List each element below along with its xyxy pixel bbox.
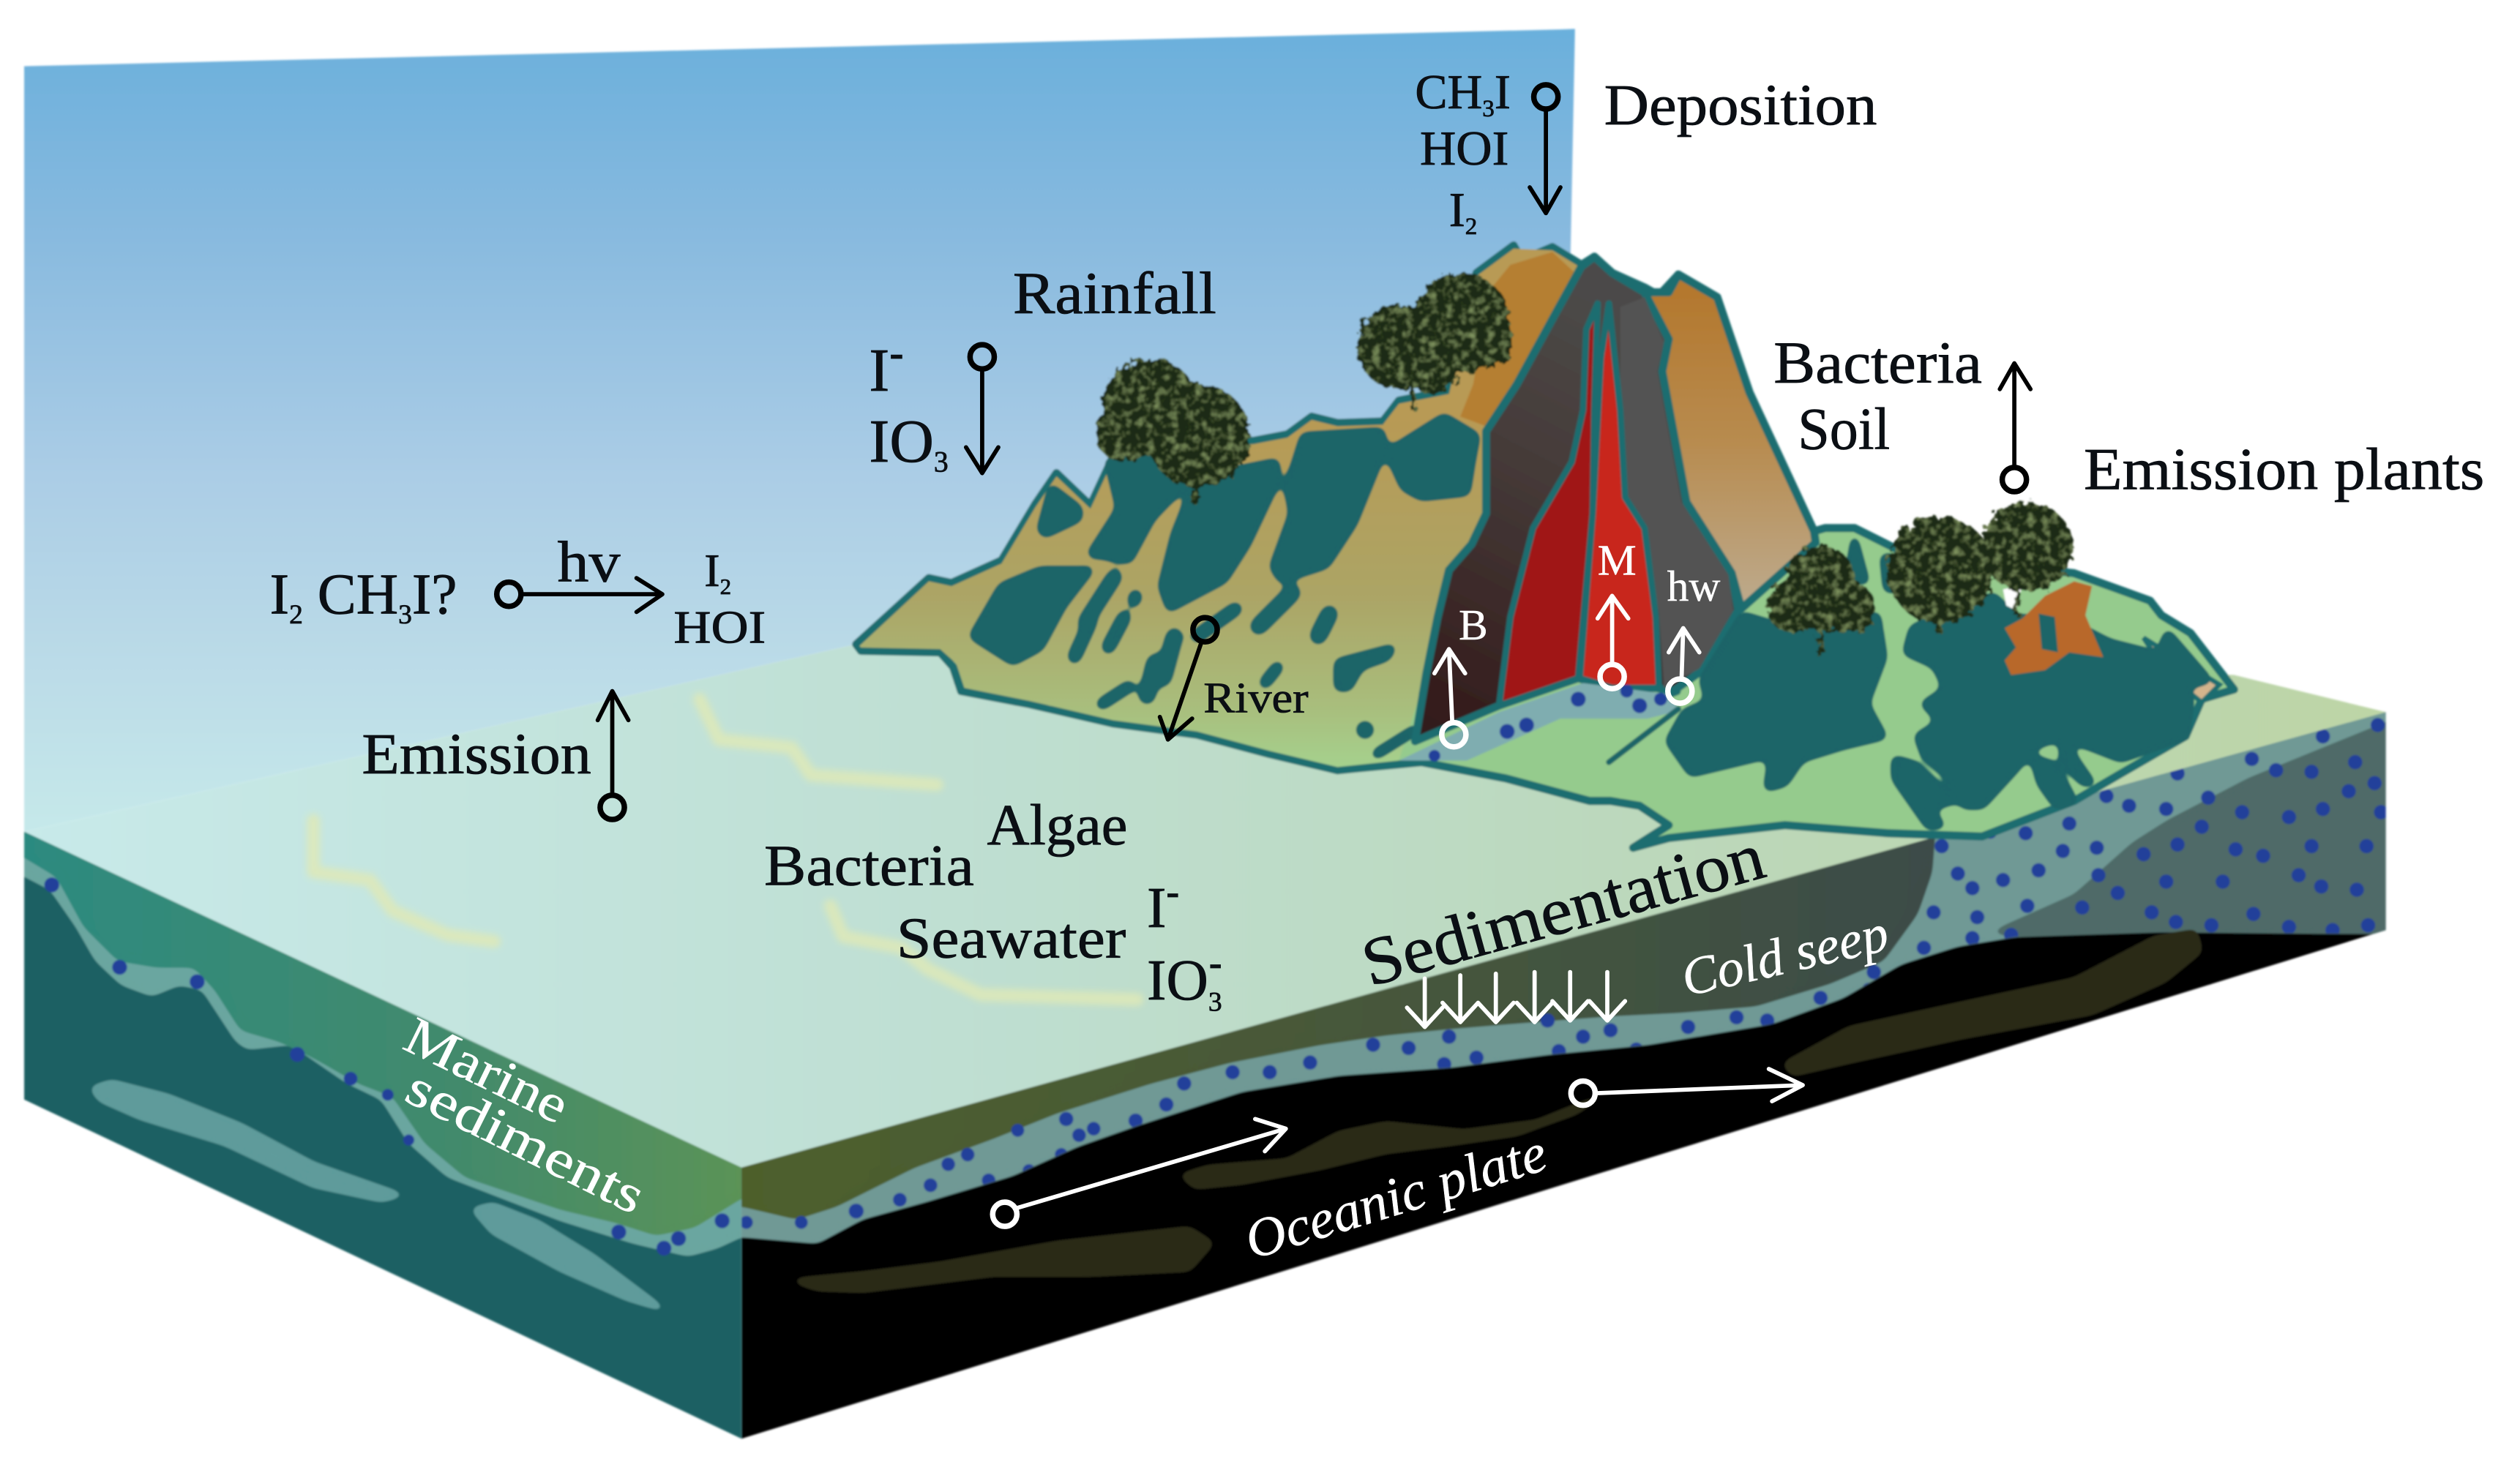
orange soil patch bbox=[2005, 581, 2104, 675]
dots at volcano foot bbox=[1429, 685, 1667, 762]
label: rainfall species: - bbox=[889, 330, 903, 376]
label: deposited species: 2 bbox=[1465, 214, 1477, 240]
dark lenses in the oceanic plate bbox=[793, 931, 2200, 1290]
lenses in left face bbox=[92, 1082, 664, 1310]
grey sediment band at volcano foot bbox=[1399, 683, 1680, 760]
label: deposited species: I bbox=[1495, 66, 1511, 119]
label: Deposition: Deposition bbox=[1604, 73, 1877, 138]
label: rainfall species bbox=[869, 330, 949, 478]
label: photolysis products bbox=[673, 544, 766, 653]
arrow: plate motion right bbox=[1571, 1069, 1803, 1106]
label: seawater species: IO bbox=[1147, 948, 1208, 1013]
label: seawater species bbox=[1147, 871, 1222, 1018]
tree 5 bbox=[1982, 502, 2073, 615]
arrow: river bbox=[1160, 618, 1217, 740]
label: deposited species: HOI bbox=[1420, 122, 1508, 176]
label: photolysis products: I bbox=[704, 544, 720, 596]
label: photolysis products: 2 bbox=[720, 574, 731, 599]
label: deposited species: 3 bbox=[1482, 96, 1495, 122]
algae streaks on seawater bbox=[313, 699, 1137, 999]
label: seawater species: 3 bbox=[1208, 988, 1222, 1018]
volcano: grey eastern flank bbox=[1620, 297, 1733, 688]
arrow: plate motion left bbox=[992, 1119, 1286, 1226]
arrow: hw bbox=[1668, 628, 1700, 703]
brown upper slope bbox=[1460, 252, 1575, 427]
tree 1 bbox=[1095, 359, 1250, 504]
label: volatile iodine: I? bbox=[412, 563, 457, 627]
label: photolysis products: HOI bbox=[673, 601, 766, 653]
label: Marine sediments: Marine bbox=[395, 1005, 578, 1135]
island: green coast and shoreline bbox=[856, 245, 2234, 848]
left face sediment dots bbox=[45, 877, 730, 1256]
label: Emission plants: Emission plants bbox=[2084, 436, 2484, 503]
label: seawater species: - bbox=[1209, 942, 1222, 984]
label: volatile iodine: 2 bbox=[289, 600, 303, 630]
tan western hillside bbox=[859, 249, 1582, 767]
tree 4 bbox=[1887, 517, 1993, 633]
teal vegetation patches on western hillside bbox=[973, 416, 1476, 754]
label: Cold seep: Cold seep bbox=[1676, 903, 1893, 1008]
label: rainfall species: IO bbox=[869, 408, 934, 476]
light sediment layer bbox=[711, 686, 2415, 1243]
front block face: oceanic plate bbox=[711, 686, 2415, 1438]
tree 3 bbox=[1767, 546, 1875, 657]
sky backdrop bbox=[24, 29, 1575, 832]
arrows: sedimentation bbox=[1407, 972, 1625, 1027]
cold seep and olive layer bbox=[711, 807, 1937, 1219]
darker accretion wedge bbox=[1997, 721, 2387, 939]
label: Soil: Soil bbox=[1798, 396, 1890, 462]
arrow: B bbox=[1435, 649, 1466, 747]
label: hw: hw bbox=[1667, 562, 1720, 610]
label: hv: hv bbox=[557, 530, 621, 594]
label: Marine sediments bbox=[395, 1005, 655, 1226]
label: rainfall species: 3 bbox=[934, 446, 949, 478]
label: River: River bbox=[1203, 673, 1309, 721]
label: volatile iodine: CH bbox=[303, 563, 398, 627]
label: seawater species: - bbox=[1166, 871, 1179, 913]
label: Bacteria on land: Bacteria bbox=[1773, 329, 1982, 396]
magma chamber left (dark red) bbox=[1499, 304, 1598, 705]
eastern hills bbox=[1669, 539, 2219, 827]
arrow: emission from plants and soil bbox=[2000, 364, 2030, 492]
label: Algae: Algae bbox=[987, 793, 1128, 858]
front face sediment dots bbox=[740, 718, 2388, 1228]
label: Sedimentation: Sedimentation bbox=[1354, 818, 1773, 1002]
label: Marine sediments: sediments bbox=[397, 1057, 655, 1226]
arrow: sea emission bbox=[598, 691, 629, 819]
seawater surface bbox=[24, 645, 2386, 1168]
brown eastern slope bbox=[1645, 274, 1816, 609]
tree 2 bbox=[1357, 273, 1514, 410]
label: volatile iodine: I bbox=[270, 563, 289, 627]
arrow: rainfall bbox=[966, 345, 998, 473]
arrow: M bbox=[1598, 596, 1629, 689]
label: deposited species: I bbox=[1449, 184, 1465, 237]
label: Bacteria in seawater: Bacteria bbox=[764, 833, 974, 898]
coastal line bbox=[1609, 709, 1678, 762]
label: M: M bbox=[1598, 536, 1637, 585]
label: volatile iodine: 3 bbox=[398, 600, 412, 630]
label: Seawater: Seawater bbox=[897, 907, 1126, 971]
label: rainfall species: I bbox=[869, 337, 889, 405]
label: seawater species: I bbox=[1147, 876, 1166, 940]
label: deposited species: CH bbox=[1415, 66, 1482, 119]
left block face: marine sediments bbox=[23, 830, 744, 1440]
label: Rainfall: Rainfall bbox=[1013, 260, 1216, 326]
label: Oceanic plate: Oceanic plate bbox=[1238, 1122, 1554, 1272]
arrow: deposition bbox=[1530, 85, 1560, 213]
label: Emission: Emission bbox=[362, 722, 591, 787]
label: B: B bbox=[1459, 601, 1488, 649]
label: deposited species bbox=[1415, 66, 1511, 240]
magma chamber right (bright red) bbox=[1579, 304, 1659, 688]
volcano: dark flanks bbox=[1415, 257, 1738, 741]
arrow: photolysis bbox=[497, 578, 662, 612]
